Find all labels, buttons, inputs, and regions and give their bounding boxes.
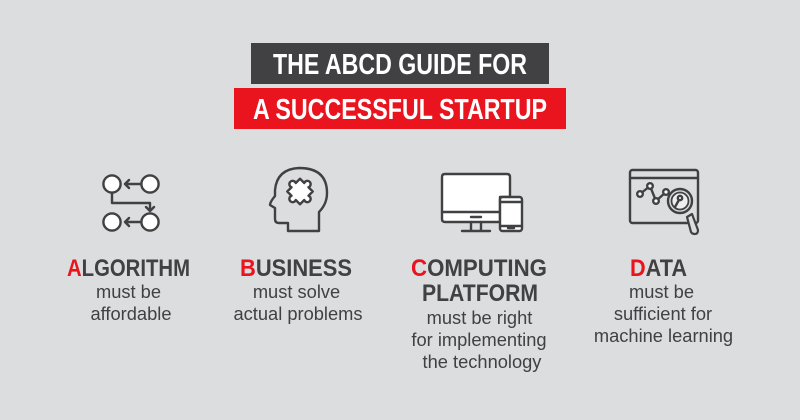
panel: business: [233, 168, 363, 324]
heading: business: BUSINESS: [240, 255, 352, 282]
title line 2 banner: A SUCCESSFUL STARTUP: [253, 94, 547, 126]
text: algorithm description: affordable: [91, 303, 171, 324]
text: business description: actual problems: [233, 303, 363, 324]
text: data description: sufficient for: [614, 303, 712, 324]
text: computing platform description: for implementing: [411, 329, 547, 350]
icon: head with puzzle piece: [270, 168, 327, 231]
icon: monitor and phone: [442, 174, 522, 231]
title line 1 banner: [251, 43, 549, 84]
text: business description: must solve: [253, 281, 340, 302]
text: data description: machine learning: [594, 325, 733, 346]
heading: data: DATA: [630, 255, 687, 282]
icon: algorithm flow: [103, 175, 159, 231]
text: computing platform description: must be right: [427, 307, 532, 328]
panel: data: [594, 170, 733, 346]
text: computing platform description: the technology: [423, 351, 542, 372]
heading: platform: PLATFORM: [422, 280, 538, 307]
title line 2 banner: [234, 88, 566, 129]
icon: chart with magnifier: [630, 170, 698, 234]
panel: algorithm: [67, 175, 190, 324]
title: [234, 43, 566, 129]
heading: computing: COMPUTING: [411, 255, 547, 282]
title line 1 banner: THE ABCD GUIDE FOR: [273, 49, 527, 81]
text: data description: [594, 281, 733, 346]
panel: computing platform: [411, 174, 547, 372]
text: algorithm description: must be: [96, 281, 161, 302]
text: computing platform description: [411, 307, 547, 372]
heading: algorithm: ALGORITHM: [67, 255, 190, 282]
text: data description: must be: [629, 281, 694, 302]
text: business description: [233, 281, 363, 324]
text: algorithm description: [91, 281, 171, 324]
